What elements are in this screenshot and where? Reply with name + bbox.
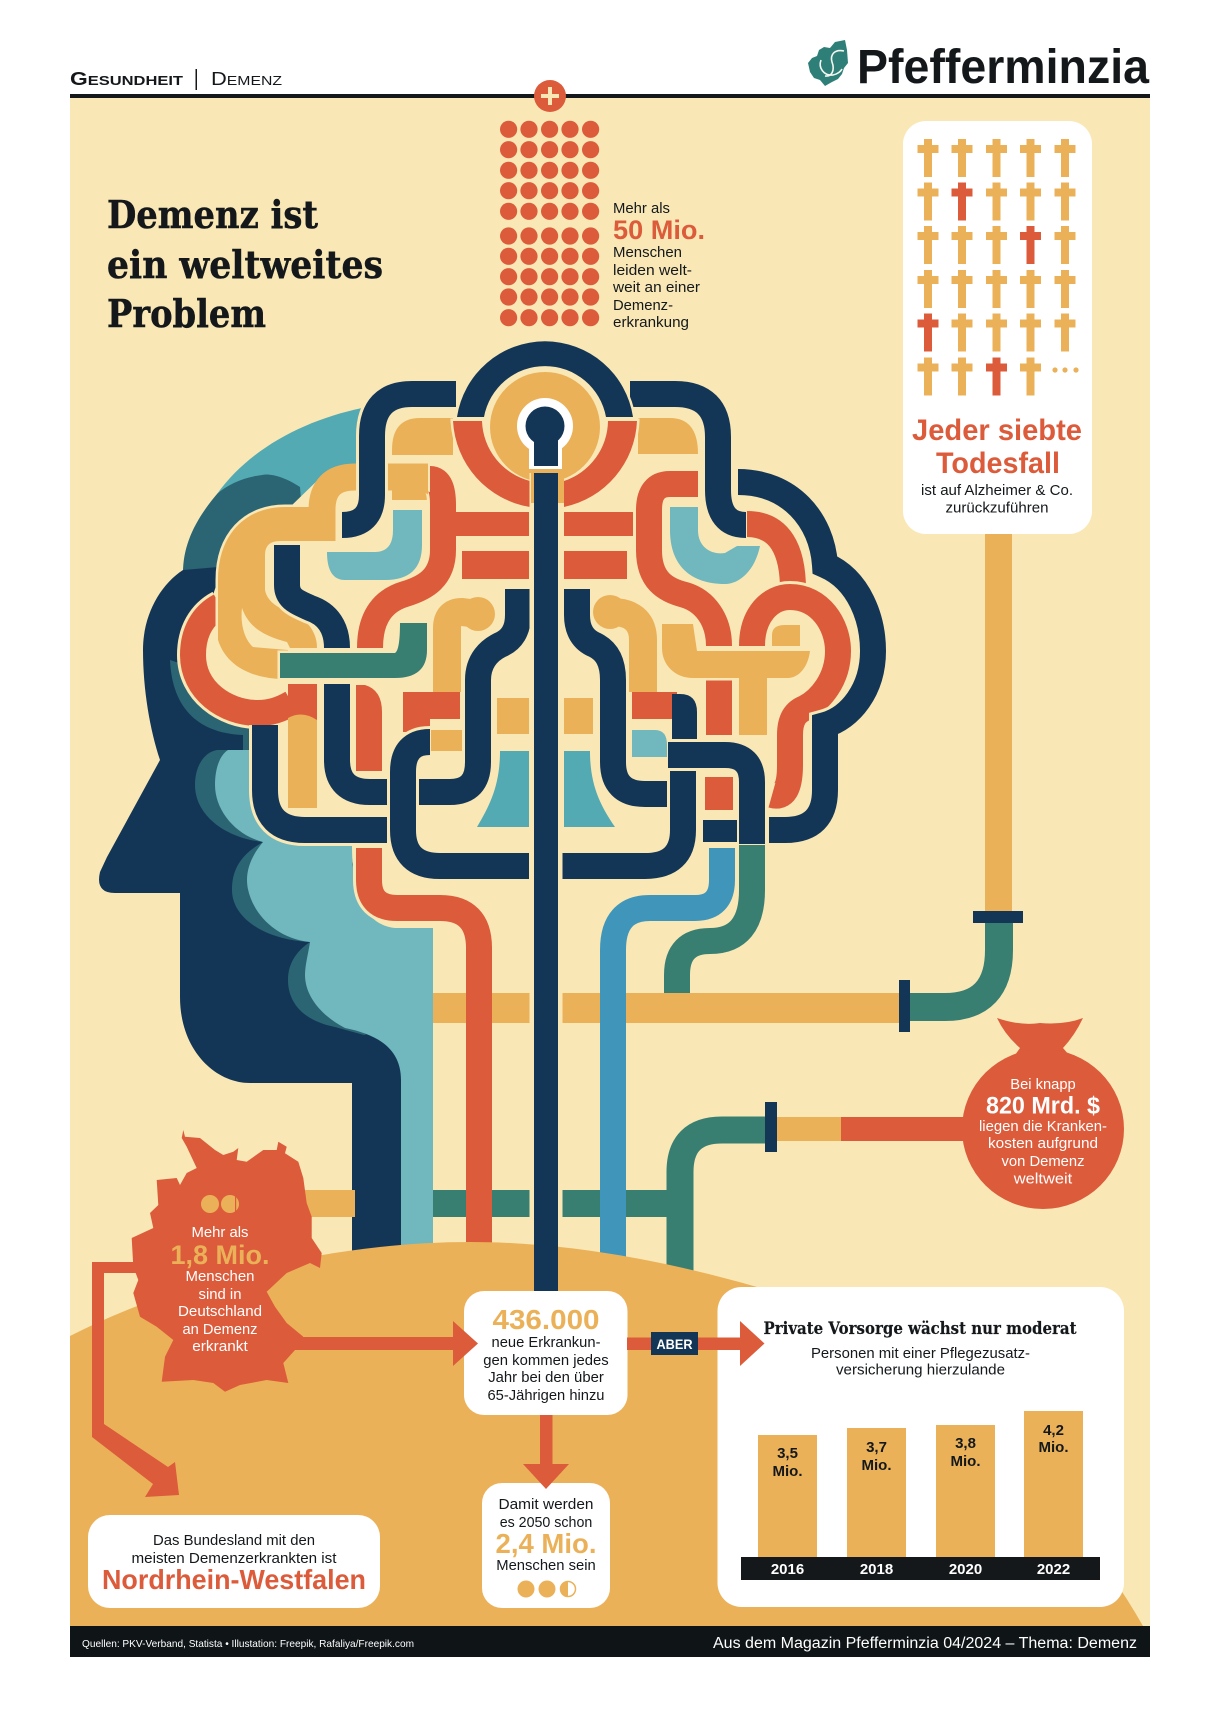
navy pipes [265,394,873,866]
bag text: liegen die Kranken- [979,1118,1107,1135]
card text [912,414,1082,516]
plus badge [534,80,566,112]
right pieces [593,418,838,810]
pipe: green elbow lower [680,1130,766,1300]
chart panel [718,1287,1124,1607]
red left arc [193,606,317,720]
bar chart: 3,8 [955,1435,976,1452]
arrow: germany to new cases [290,1321,478,1366]
central pipe gap [530,473,562,1253]
bag text [979,1076,1107,1188]
box: new cases: 436.000 [492,1304,600,1335]
box: NRW [88,1515,380,1608]
box: new cases: 65-Jährigen hinzu [488,1387,604,1404]
bag text: Bei knapp [1010,1076,1076,1093]
pipe: lower left orange [295,1190,355,1217]
pipe: bag connector [777,1117,841,1141]
pipe: green elbow right [905,920,999,1007]
label: aber: ABER [656,1336,692,1352]
head: face profile [99,560,402,1260]
pipe: blue trunk [613,848,722,1280]
teal curve left [327,510,422,580]
callout: 50 million: Demenz- [613,297,673,314]
arrow: down to 2050 [523,1415,569,1489]
germany text: Deutschland [178,1303,262,1320]
orange left lobe [218,507,335,679]
bar chart: 4,2 [1043,1422,1064,1439]
central pipe [534,473,558,1291]
callout: 50 million: Mehr als [613,200,670,217]
bar chart: 2022 [1037,1561,1070,1578]
dots [518,1580,576,1598]
box: new cases: Jahr bei den über [488,1369,604,1386]
head: lower shadow [170,660,380,1035]
pipe: lower green horizontal [433,1190,683,1217]
lower left pieces [288,685,593,808]
bag text: 820 Mrd. $ [986,1093,1101,1120]
box: new cases [464,1291,628,1415]
bar chart: 3,7 [866,1439,887,1456]
head: light neck [215,750,433,1260]
bag text: kosten aufgrund [988,1135,1098,1152]
bar chart: Mio. [950,1453,980,1470]
pipe: orange to card [985,534,1012,914]
box: 2050 projection: Damit werden [498,1496,594,1513]
dot matrix: 50 million people [500,121,599,326]
title: Problem [107,291,266,336]
green connector [280,623,427,678]
germany icon dots [201,1195,239,1213]
box: new cases: neue Erkrankun- [492,1334,600,1351]
orange strip behind keyhole [531,470,564,503]
pipe: red trunk [369,848,479,1260]
brain interior [193,330,873,845]
title: Demenz ist [107,192,318,237]
footer: Aus dem Magazin Pfefferminzia 04/2024 – Thema: Demenz [713,1635,1137,1652]
arrow: germany to NRW [92,1262,179,1497]
keyhole [517,398,573,469]
pipe: green to brain [677,844,752,993]
title: ein weltweites [107,242,383,287]
footer: Quellen: PKV-Verband, Statista • Illustation: Freepik, Rafaliya/Freepik.com [82,1638,414,1650]
head silhouette [99,408,433,1260]
bar chart: 2018 [860,1561,893,1578]
hill [70,1242,1143,1626]
page background [70,96,1150,1656]
crown arcs and orange disk [453,341,637,507]
callout: 50 million: erkrankung [613,314,689,331]
pipe: red trunk halo [369,848,433,908]
box: 2050 projection: es 2050 schon [500,1514,592,1531]
card text: ist auf Alzheimer & Co. [921,482,1073,499]
label: aber [651,1332,698,1355]
bar chart: 3,5 [777,1445,798,1462]
card: deaths [903,121,1092,534]
teal flasks [477,751,615,827]
germany text: sind in [198,1286,242,1303]
germany map [132,1130,322,1392]
pipe: band side [899,980,910,1032]
money bag [962,1018,1124,1209]
brain [193,330,873,866]
orange hook left [447,597,495,692]
callout: 50 million: weit an einer [612,279,700,296]
chart subheading: versicherung hierzulande [836,1362,1005,1379]
red S left [370,479,443,648]
pipe: band lower [765,1102,777,1152]
box: new cases: gen kommen jedes [483,1352,609,1369]
logo: Pfefferminzia [857,41,1149,94]
card text: Todesfall [936,447,1060,480]
connector pipes [295,534,1023,1300]
header: Demenz [211,69,282,89]
bar chart: Mio. [862,1457,892,1474]
bag text: von Demenz [1002,1153,1084,1170]
crosses [918,139,1079,396]
box: 2050 projection: 2,4 Mio. [496,1528,596,1559]
germany text: 1,8 Mio. [170,1240,270,1270]
germany text: Mehr als [192,1224,248,1241]
bar chart: Mio. [772,1463,802,1480]
pipe: orange horizontal [433,993,905,1023]
germany text: an Demenz [182,1321,258,1338]
bag text: weltweit [1013,1171,1073,1188]
callout: 50 million: Menschen [613,244,682,261]
bar chart [741,1411,1100,1580]
card text: zurückzuführen [946,500,1048,516]
box: NRW: meisten Demenzerkrankten ist [132,1550,337,1567]
card text: Jeder siebte [912,414,1082,447]
head: upper shadow [183,474,310,620]
germany text: Menschen [186,1268,254,1285]
callout: 50 million: 50 Mio. [613,215,705,245]
bar chart: 2016 [771,1561,804,1578]
chart heading: Private Vorsorge wächst nur moderat [764,1319,1077,1339]
box: 2050 projection: Menschen sein [496,1557,596,1574]
germany text [170,1224,270,1355]
title [107,192,383,336]
box: 2050 projection [482,1483,610,1608]
germany text: erkrankt [192,1338,249,1355]
callout: 50 million [612,200,705,331]
bar chart: 2020 [949,1561,982,1578]
chart subheading: Personen mit einer Pflegezusatz- [811,1345,1030,1362]
arrow: aber [627,1321,764,1366]
head: crown [217,408,370,620]
section label: Gesundheit [70,69,183,89]
box: NRW: Das Bundesland mit den [153,1532,315,1549]
chart subheading [811,1345,1030,1379]
pipe: band top [973,911,1023,923]
orange top band [322,477,428,541]
bar chart: Mio. [1038,1439,1068,1456]
footer [70,1626,1150,1657]
orange block [392,464,428,500]
callout: 50 million: leiden welt- [613,262,692,279]
box: NRW: Nordrhein-Westfalen [102,1564,366,1595]
header [70,40,1150,98]
red bars [456,512,637,579]
orange top left [392,418,453,455]
